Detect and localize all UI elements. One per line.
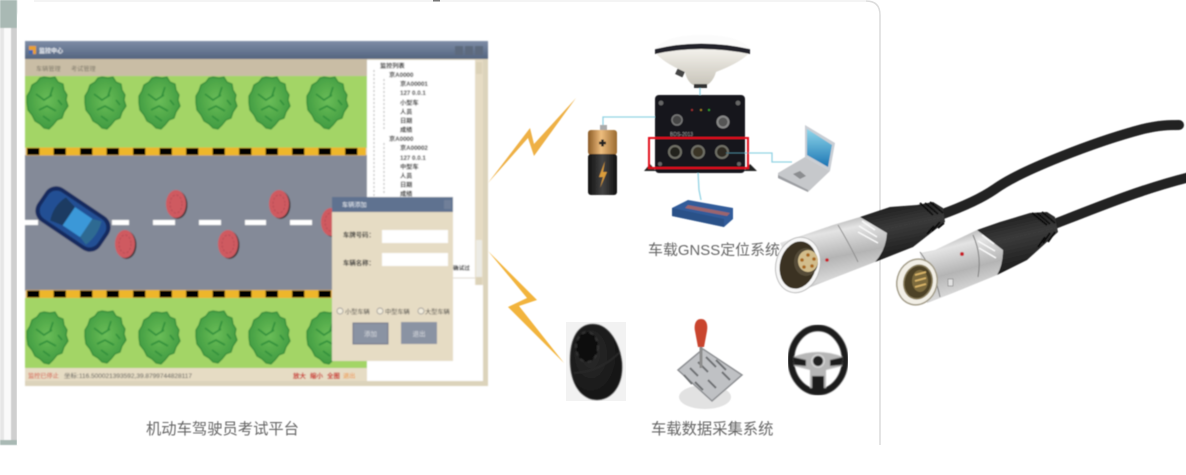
- icon: GNSS receiver box: [644, 95, 757, 173]
- panel: GNSS positioning system: [588, 35, 835, 227]
- status bar: [25, 368, 367, 381]
- add vehicle dialog: 车牌号码：: [343, 230, 375, 239]
- arrow: lower lightning bolt: [488, 251, 564, 363]
- icon: network switch: [672, 200, 733, 227]
- window title bar: 监控中心: [39, 47, 63, 55]
- icon: GNSS receiver box: BDS-2013: [670, 132, 693, 138]
- add vehicle dialog: 车辆名称：: [343, 258, 375, 267]
- arrow: upper lightning bolt: [488, 98, 576, 183]
- status bar: 缩小: [310, 371, 324, 380]
- blue car: [30, 181, 116, 257]
- device tree panel: 日期: [400, 117, 412, 125]
- panel: white rounded card: [17, 0, 880, 445]
- device tree panel: 监控列表: [380, 62, 406, 70]
- icon: camera: [566, 322, 626, 401]
- traffic cones: [115, 190, 342, 259]
- add vehicle dialog: 小型车辆: [345, 308, 370, 316]
- device tree panel: 确试过: [453, 264, 470, 272]
- panel: exam platform window: [25, 41, 488, 386]
- icon: battery: [588, 125, 617, 195]
- road: [25, 152, 367, 294]
- window shadow and frame: [25, 41, 488, 386]
- device tree panel: 127 0.0.1: [400, 155, 426, 162]
- status bar: 坐标:116.500021393592,39.8799744828117: [64, 372, 193, 380]
- add vehicle dialog: 中型车辆: [385, 308, 410, 316]
- caption: GNSS system: 车载GNSS定位系统: [648, 242, 780, 259]
- menu bar: 车辆管理: [36, 65, 61, 73]
- device tree panel: 小型车: [400, 99, 419, 107]
- device tree panel: 京A00001: [400, 80, 428, 88]
- upper grass with trees: [25, 76, 367, 148]
- highlight: red box: [649, 138, 748, 168]
- device tree panel: 京A0000: [389, 71, 414, 79]
- panel: vehicle data acquisition system: [566, 319, 845, 409]
- add vehicle dialog: 退出: [412, 329, 426, 338]
- icon: socket connector: [770, 202, 945, 298]
- icon: gear shifter: [678, 319, 742, 409]
- left backdrop strip: [0, 0, 17, 445]
- add vehicle dialog: 车辆添加: [342, 201, 367, 209]
- icon: steering wheel: [791, 328, 845, 392]
- menu bar: 考试管理: [71, 65, 96, 73]
- caption: exam platform: 机动车驾驶员考试平台: [146, 421, 299, 438]
- device tree panel: 成绩: [400, 190, 413, 198]
- lower grass with trees: [25, 298, 367, 368]
- device tree panel: 人员: [400, 109, 412, 116]
- icon: GNSS antenna: [655, 35, 750, 88]
- caption: data acquisition system: 车载数据采集系统: [651, 421, 773, 438]
- add vehicle dialog: 添加: [364, 329, 377, 338]
- add vehicle dialog: 大型车辆: [425, 308, 450, 316]
- window title bar: [25, 41, 488, 59]
- device tree panel: 127 0.0.1: [400, 90, 426, 97]
- add vehicle dialog: [332, 197, 453, 361]
- icon: plug connector: [892, 212, 1058, 309]
- device tree panel: 人员: [400, 173, 412, 180]
- status bar: 退出: [343, 372, 355, 380]
- device tree panel: 京A0000: [389, 135, 414, 143]
- device tree panel: [367, 60, 483, 381]
- icon: laptop: [778, 125, 835, 192]
- status bar: 监控已停止: [28, 372, 59, 380]
- icon: black cables: [940, 125, 1186, 225]
- device tree panel: 日期: [400, 181, 412, 189]
- status bar: 全图: [327, 371, 340, 380]
- device tree panel: 中型车: [400, 163, 419, 171]
- device tree panel: 京A00002: [400, 144, 428, 152]
- menu bar: [25, 59, 367, 76]
- device tree panel: 成绩: [400, 126, 413, 134]
- status bar: 放大: [293, 371, 306, 380]
- connection lines: [603, 85, 792, 200]
